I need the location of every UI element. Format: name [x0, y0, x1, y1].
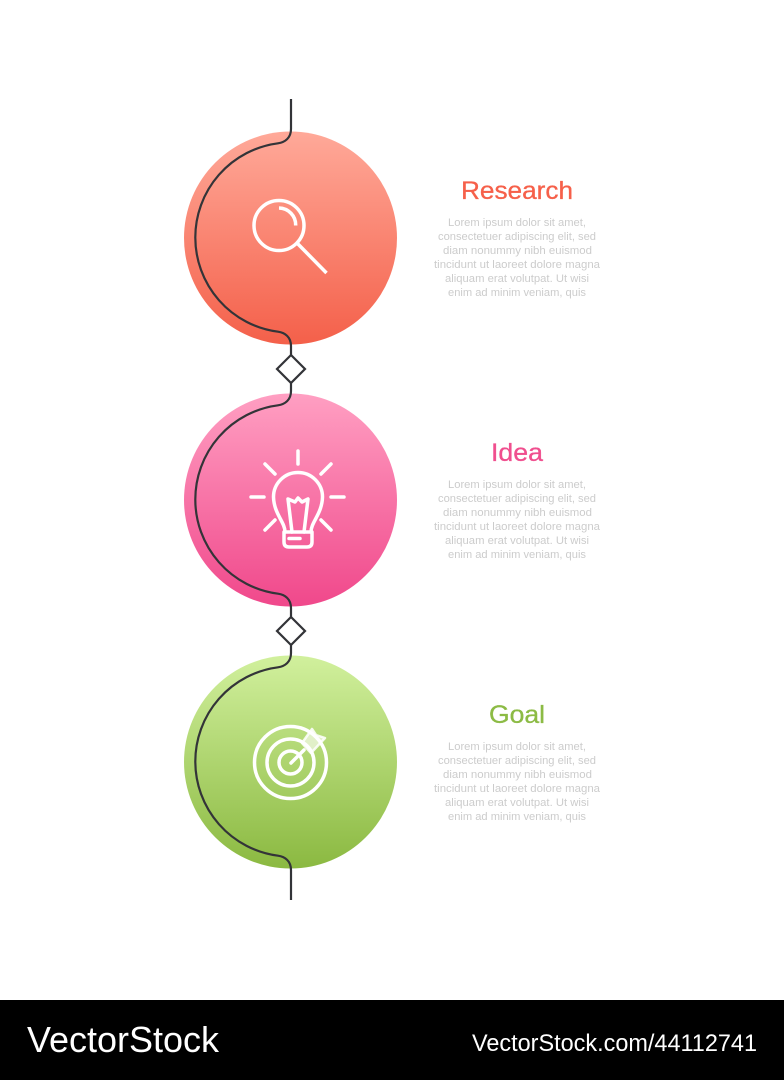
text block: goal description — [434, 741, 601, 823]
panel: goal step — [184, 656, 601, 868]
heading: idea: Idea — [491, 439, 543, 467]
circle: goal — [184, 656, 397, 868]
text block: research description: aliquam erat volutpat. Ut wisi — [445, 273, 589, 285]
text block: research description: diam nonummy nibh euismod — [443, 245, 592, 257]
text block: idea description: enim ad minim veniam, quis — [448, 549, 586, 561]
text block: research description: consectetuer adipiscing elit, sed — [438, 231, 596, 243]
text block: goal description: Lorem ipsum dolor sit amet, — [448, 741, 586, 753]
text block: idea description: tincidunt ut laoreet dolore magna — [434, 521, 601, 533]
text block: goal description: enim ad minim veniam, quis — [448, 811, 586, 823]
heading: research: Research — [461, 177, 573, 205]
text block: goal description: aliquam erat volutpat. Ut wisi — [445, 797, 589, 809]
circle: idea — [184, 394, 397, 606]
icon: magnifying glass — [254, 200, 326, 273]
text block: research description: Lorem ipsum dolor sit amet, — [448, 217, 586, 229]
text block: research description: enim ad minim veniam, quis — [448, 287, 586, 299]
icon: target with arrow — [254, 726, 326, 798]
diamond marker 1 — [277, 355, 305, 383]
text block: research description — [434, 217, 601, 299]
diamond marker 2 — [277, 617, 305, 645]
text block: idea description: diam nonummy nibh euismod — [443, 507, 592, 519]
text block: research description: tincidunt ut laoreet dolore magna — [434, 259, 601, 271]
heading: goal: Goal — [489, 701, 545, 729]
text block: idea description: Lorem ipsum dolor sit amet, — [448, 479, 586, 491]
footer url text: VectorStock.com/44112741 — [472, 1030, 757, 1057]
text block: idea description: aliquam erat volutpat. Ut wisi — [445, 535, 589, 547]
connector line — [195, 99, 291, 900]
text block: goal description: diam nonummy nibh euismod — [443, 769, 592, 781]
footer logo text: VectorStock — [27, 1019, 220, 1060]
footer bar — [0, 1000, 784, 1080]
text block: goal description: tincidunt ut laoreet dolore magna — [434, 783, 601, 795]
circle: research — [184, 132, 397, 344]
text block: goal description: consectetuer adipiscing elit, sed — [438, 755, 596, 767]
icon: light bulb — [251, 451, 344, 547]
text block: idea description — [434, 479, 601, 561]
panel: research step — [184, 132, 601, 344]
text block: idea description: consectetuer adipiscing elit, sed — [438, 493, 596, 505]
panel: idea step — [184, 394, 601, 606]
